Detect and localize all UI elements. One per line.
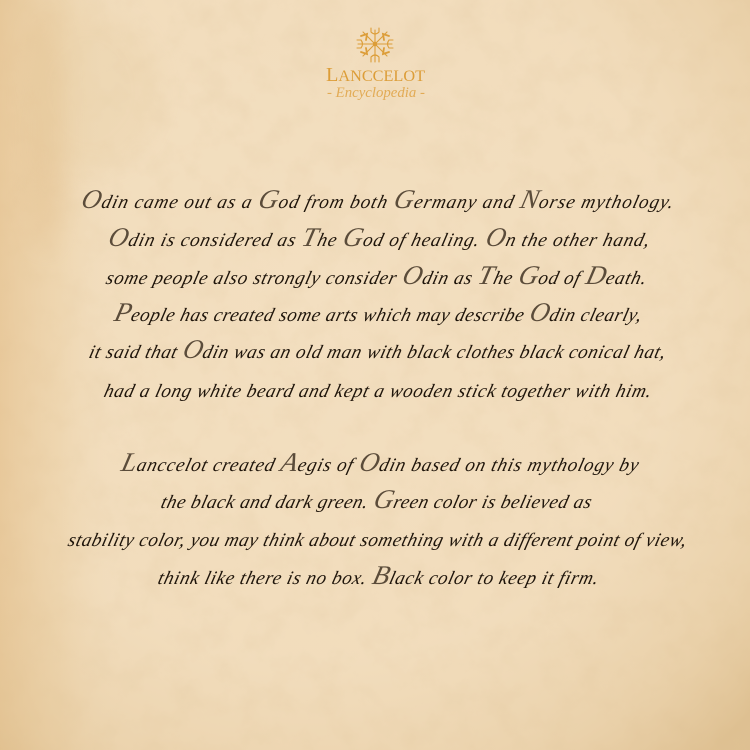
text block: Aegis of Odin: Lanccelot created Aegis of Odin based on this mythology by bbox=[118, 447, 643, 477]
text block: Aegis of Odin: the black and dark green. Green color is believed as bbox=[159, 484, 596, 514]
text block: Aegis of Odin bbox=[66, 447, 689, 590]
text block: Odin mythology: People has created some arts which may describe Odin clearly, bbox=[111, 297, 646, 327]
text block: Odin mythology: it said that Odin was an old man with black clothes black conical hat, bbox=[87, 334, 670, 364]
text block: Odin mythology: had a long white beard and kept a wooden stick together with him. bbox=[102, 381, 654, 402]
text block: Aegis of Odin: think like there is no box. Black color to keep it firm. bbox=[156, 560, 603, 590]
text block: Odin mythology: Odin came out as a God from both Germany and Norse mythology. bbox=[79, 184, 678, 214]
icon: compass emblem bbox=[357, 28, 393, 62]
brand name: LANCCELOT bbox=[326, 64, 425, 86]
text block: Odin mythology: some people also strongly consider Odin as The God of Death. bbox=[104, 260, 651, 290]
text block: Odin mythology bbox=[79, 184, 678, 402]
subtitle: - Encyclopedia - bbox=[327, 85, 425, 101]
text block: Odin mythology: Odin is considered as The God of healing. On the other hand, bbox=[106, 222, 654, 252]
text block: Aegis of Odin: stability color, you may think about something with a different point of view, bbox=[66, 530, 689, 551]
logo: Lanccelot Encyclopedia bbox=[326, 28, 425, 101]
